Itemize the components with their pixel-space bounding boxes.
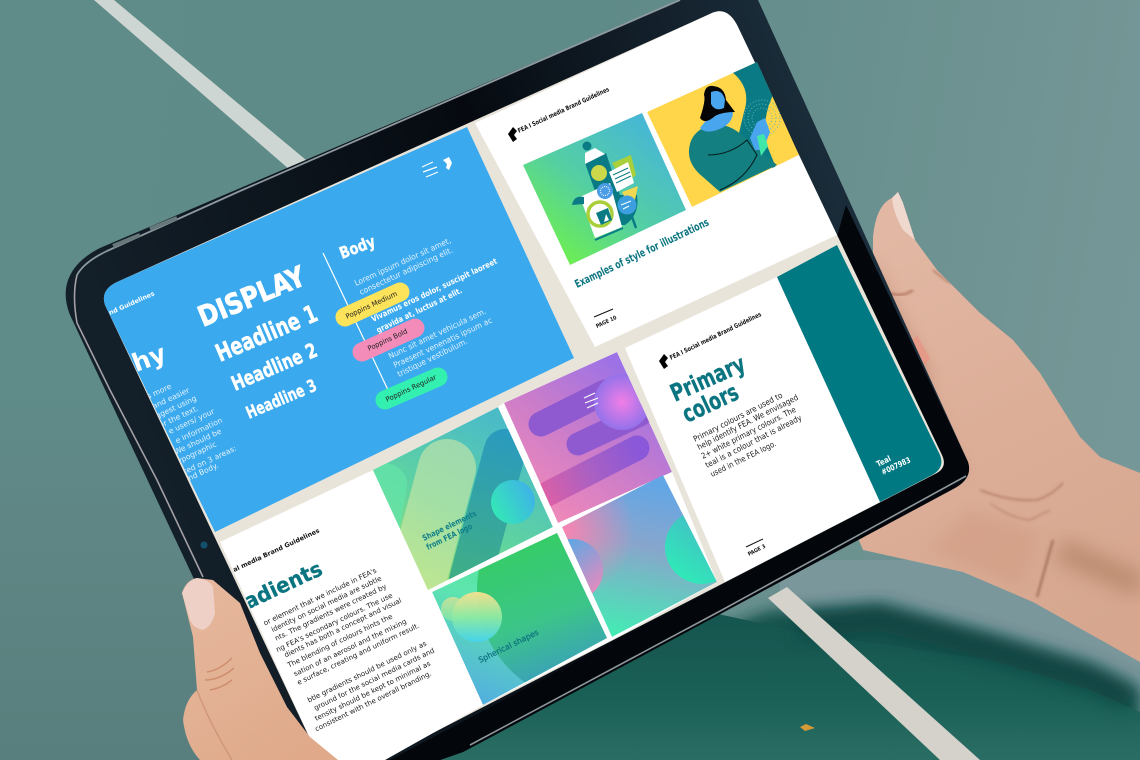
panel: gradients text page bbox=[200, 470, 483, 760]
heading: Primary bbox=[666, 350, 750, 407]
arrow logo black bbox=[508, 127, 517, 142]
pill: Poppins Medium: Poppins Medium bbox=[344, 290, 399, 321]
caption: Examples of style for illustrations bbox=[573, 216, 711, 291]
gradient white gutter bbox=[373, 352, 717, 705]
illustration: woman with phone bbox=[647, 50, 800, 207]
screen beige base bbox=[104, 11, 944, 760]
body paragraph bbox=[692, 391, 803, 479]
running header clipped: FEA I Social media Brand Guidelines bbox=[34, 289, 156, 350]
body specimens: Nunc sit amet vehicula sem. bbox=[387, 307, 488, 361]
typography heading and paragraph clipped: We should be bbox=[173, 427, 223, 456]
swatch label bbox=[875, 454, 912, 477]
typography heading and paragraph clipped: Typography bbox=[6, 339, 170, 425]
typography heading and paragraph clipped: or the text. bbox=[158, 404, 200, 430]
running header: FEA I Social media Brand Guidelines bbox=[668, 310, 763, 362]
panel: shape elements: Shape elements bbox=[421, 509, 478, 543]
swatch label: Teal bbox=[875, 454, 893, 469]
hand shading bbox=[865, 260, 1140, 597]
body paragraphs: dients has both a concept and visual bbox=[283, 597, 403, 659]
hamburger menu icon bbox=[422, 162, 438, 177]
body paragraph: 2+ white primary colours. The bbox=[700, 405, 798, 461]
body paragraphs: btle gradients should be used only as bbox=[306, 639, 428, 704]
panel: spherical shapes: Spherical shapes bbox=[477, 628, 540, 665]
page number: PAGE 3 bbox=[747, 544, 767, 558]
lower right bezel in deep black bbox=[390, 205, 969, 760]
side buttons top bbox=[113, 218, 177, 246]
running header: FEA I Social media Brand Guidelines bbox=[516, 85, 611, 135]
tablet rim highlight bottom bbox=[470, 476, 966, 745]
body specimens bbox=[353, 236, 499, 379]
white page background bbox=[475, 11, 837, 347]
body specimens: Lorem ipsum dolor sit amet, bbox=[353, 236, 452, 288]
court line: top left bbox=[94, 0, 306, 170]
body paragraphs bbox=[262, 566, 436, 733]
heading: colors bbox=[678, 378, 743, 428]
display specimens bbox=[193, 260, 322, 424]
tablet rim highlight top bbox=[77, 0, 680, 275]
white page background bbox=[625, 277, 880, 582]
panel: spherical shapes bbox=[432, 533, 607, 705]
body specimens: Praesent venenatis ipsum ac bbox=[392, 316, 494, 370]
panel: shape elements: from FEA logo bbox=[425, 522, 474, 552]
body paragraphs: tensity should be kept to minimal as bbox=[314, 659, 432, 723]
right hand behind the tablet bbox=[858, 192, 1140, 662]
typography heading and paragraph clipped: ggest using bbox=[154, 394, 198, 420]
body paragraphs: consistent with the overall branding. bbox=[314, 670, 433, 733]
typography heading and paragraph clipped bbox=[131, 347, 236, 480]
typography heading and paragraph clipped: typographic bbox=[173, 440, 218, 467]
typography heading and paragraph clipped: and easier bbox=[151, 385, 192, 411]
tablet rim highlight left bbox=[74, 275, 203, 577]
arrow logo white bbox=[443, 157, 452, 170]
typography heading and paragraph clipped: ted on 3 areas: bbox=[182, 444, 238, 476]
panel: illustrations bbox=[475, 11, 837, 347]
pill: Poppins Regular: Poppins Regular bbox=[384, 373, 438, 404]
typography heading and paragraph clipped: e users/ your bbox=[167, 406, 217, 436]
body paragraph: Primary colours are used to bbox=[692, 391, 784, 444]
body paragraphs: e surface, creating and uniform result. bbox=[296, 622, 421, 687]
body paragraphs: or element that we include in FEA's bbox=[262, 566, 378, 627]
panel: typography bbox=[104, 127, 574, 532]
panel: shape elements bbox=[373, 407, 553, 595]
body paragraphs: The blending of colours hints the bbox=[285, 613, 394, 670]
display specimens: DISPLAY bbox=[193, 260, 311, 333]
body paragraph: help identify FEA. We envisaged bbox=[696, 393, 800, 452]
body heading: Body bbox=[337, 232, 378, 263]
body paragraphs: ng FEA's secondary colours. The use bbox=[275, 592, 394, 654]
typography heading and paragraph clipped: e information bbox=[174, 416, 224, 445]
pill: Poppins Bold: Poppins Bold bbox=[366, 327, 409, 353]
arrow logo black bbox=[659, 354, 668, 369]
body paragraph: teal is a colour that is already bbox=[704, 413, 803, 470]
display specimens: Headline 3 bbox=[243, 376, 320, 424]
body paragraph: used in the FEA logo. bbox=[709, 439, 778, 479]
typography heading and paragraph clipped: and Body. bbox=[182, 461, 220, 485]
body specimens: consectetur adipiscing elit. bbox=[358, 246, 454, 297]
thumb nail bbox=[892, 192, 915, 240]
white page background bbox=[220, 470, 483, 760]
swatch label: #007983 bbox=[880, 456, 912, 477]
display specimens: Headline 1 bbox=[211, 300, 322, 368]
page number: PAGE 10 bbox=[595, 315, 618, 330]
court line: bottom right bbox=[768, 587, 980, 760]
blue panel background bbox=[104, 127, 574, 532]
body paragraphs: ground for the social media cards and bbox=[313, 647, 436, 712]
floor speck: orange debris bbox=[800, 724, 815, 731]
body paragraphs: identity on social media are subtle bbox=[270, 575, 383, 634]
tablet body and bezel bbox=[66, 0, 969, 760]
running header: FEA I Social media Brand Guidelines bbox=[200, 526, 321, 589]
body specimens: tristique vestibulum. bbox=[396, 337, 469, 379]
panel: bottom right gradient bbox=[562, 475, 717, 637]
page number bbox=[594, 309, 618, 330]
heading bbox=[666, 350, 750, 428]
panel: purple gradient bbox=[504, 352, 672, 523]
illustration: aerosol style bbox=[523, 113, 686, 265]
body specimens: Vivamus eros dolor, suscipit laoreet bbox=[370, 257, 499, 324]
typography heading and paragraph clipped: is more bbox=[144, 382, 173, 402]
panel: primary colors bbox=[625, 245, 941, 582]
left hand thumb bbox=[182, 578, 338, 760]
teal swatch bbox=[777, 245, 941, 502]
thumb nail bbox=[182, 578, 215, 630]
heading: Gradients bbox=[216, 557, 326, 625]
body paragraphs: nts. The gradients were created by bbox=[274, 583, 388, 643]
camera dot bbox=[200, 542, 208, 548]
display specimens: Headline 2 bbox=[228, 338, 321, 396]
body specimens: gravida at, luctus at elit. bbox=[375, 286, 464, 335]
vertical divider bbox=[323, 253, 388, 390]
body paragraphs: sation of an aerosol and the mixing bbox=[292, 618, 408, 678]
